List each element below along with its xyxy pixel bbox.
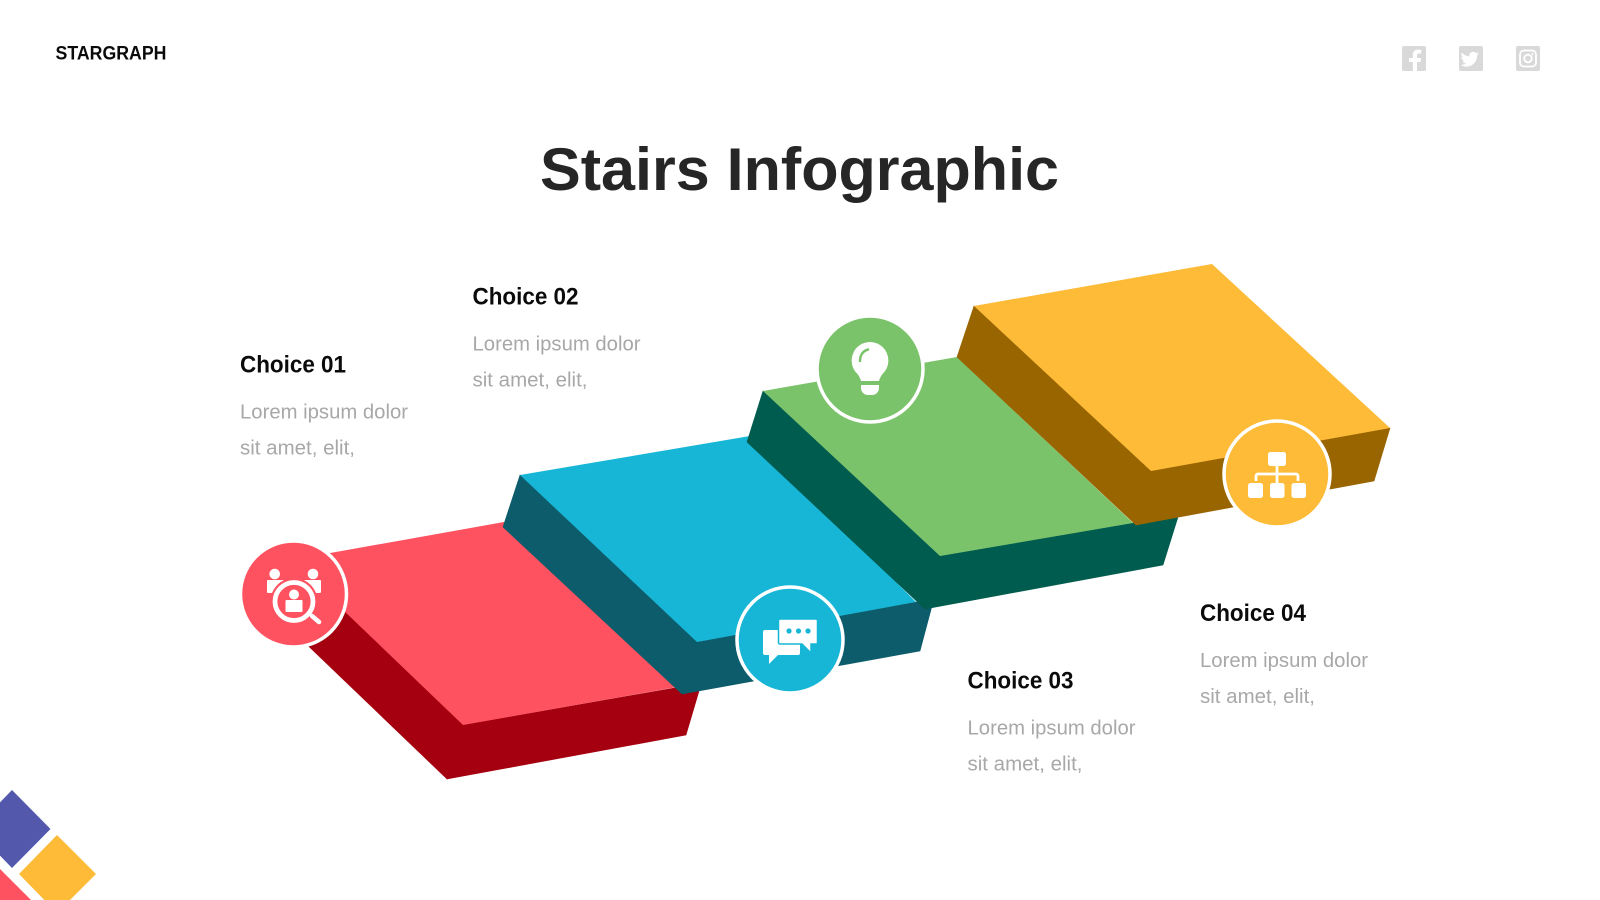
stair step 1: red [275,522,699,779]
brand logo text: STARGRAPH [56,44,166,64]
icon: instagram [1516,46,1540,71]
icon: twitter [1459,46,1483,71]
text block: choice 04: Choice 04 [1200,600,1307,627]
text block: choice 02: Choice 02 [472,284,578,310]
title: Stairs Infographic [540,136,1059,203]
text block: choice 01: Lorem ipsum dolor [240,402,408,424]
text block: choice 03: Choice 03 [968,668,1074,694]
text block: choice 02: Lorem ipsum dolor [472,334,641,356]
text block: choice 04: sit amet, elit, [1200,686,1315,708]
badge: choice 03 light bulb icon [817,316,923,422]
text block: choice 02: sit amet, elit, [472,370,588,392]
badge: choice 04 org chart icon [1224,421,1330,527]
text block: choice 04 [1200,600,1368,708]
text block: choice 01 [240,352,408,460]
stair step 4: yellow [957,264,1390,525]
text block: choice 03: Lorem ipsum dolor [968,718,1136,740]
stair step 3: green [747,357,1178,609]
text block: choice 03: sit amet, elit, [968,754,1082,776]
text block: choice 02 [472,284,641,392]
social icons [1402,46,1540,71]
badge: choice 02 chat icon [737,587,843,693]
icon: facebook [1402,46,1426,71]
text block: choice 03 [968,668,1136,776]
text block: choice 01: sit amet, elit, [240,438,355,460]
badge: choice 01 people search icon [240,541,346,647]
decorative corner diamonds [0,790,96,900]
text block: choice 01: Choice 01 [240,352,346,378]
text block: choice 04: Lorem ipsum dolor [1200,650,1368,672]
stair step 2: blue [503,436,933,694]
